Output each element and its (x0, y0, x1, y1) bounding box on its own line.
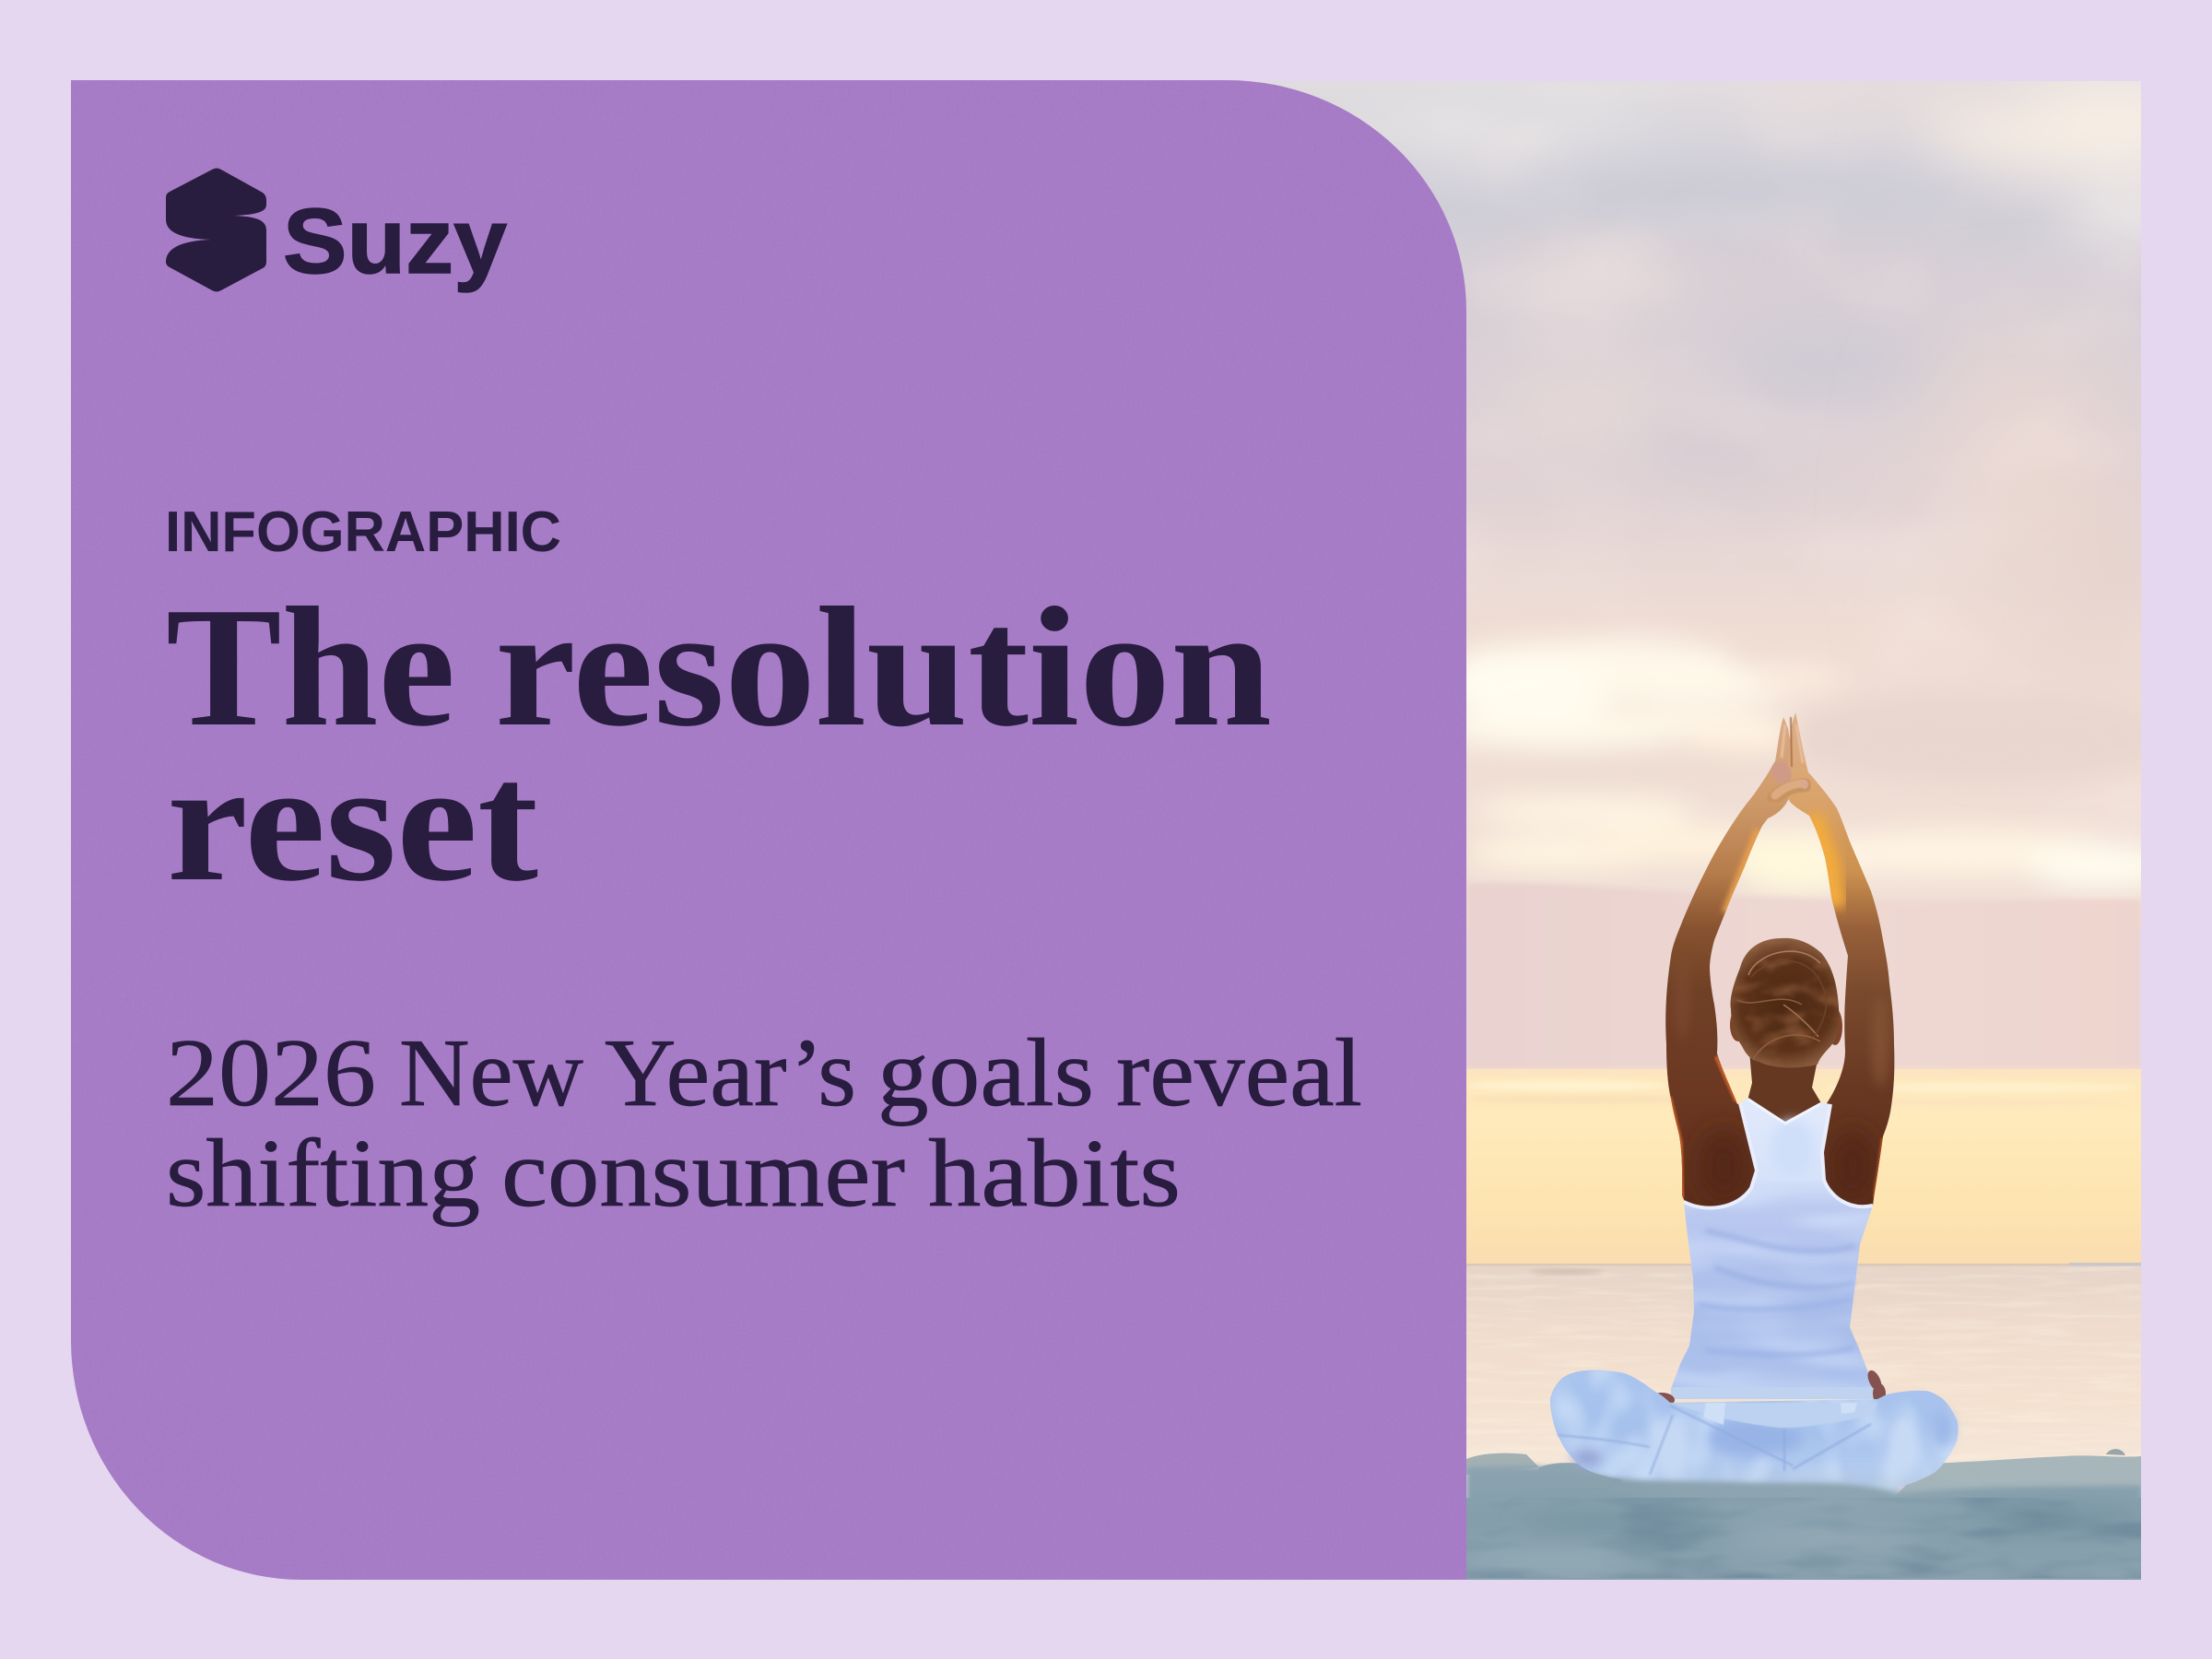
logo wordmark: Suzy (283, 190, 507, 293)
sea (1466, 1263, 2141, 1477)
hands resting by the hips (1657, 1370, 1886, 1403)
top: white racerback tank (1671, 1098, 1877, 1399)
title (166, 572, 1272, 917)
title: reset (167, 727, 538, 917)
eyebrow label: INFOGRAPHIC (165, 500, 561, 564)
person (1550, 712, 1958, 1498)
white trousers (1550, 1371, 1958, 1498)
subtitle: shifting (166, 1119, 480, 1227)
subtitle: goals (877, 1018, 1094, 1126)
title: The (166, 572, 455, 762)
panel: purple title card (71, 80, 1466, 1580)
subtitle (166, 1018, 1362, 1227)
left arm and hand (1665, 717, 1793, 1209)
title: resolution (495, 572, 1272, 762)
sky (1198, 76, 2212, 1267)
subtitle: Year’s (605, 1018, 856, 1126)
right arm and hand (1786, 712, 1894, 1209)
subtitle: 2026 (166, 1018, 376, 1126)
subtitle: New (399, 1018, 583, 1126)
subtitle: habits (928, 1119, 1181, 1227)
icon: Suzy hexagon S mark (166, 168, 266, 291)
back sand ridge (1466, 1449, 2141, 1502)
subtitle: reveal (1116, 1018, 1362, 1126)
hair (1730, 938, 1839, 1067)
photo: woman meditating on a beach at sunset (1198, 76, 2212, 1580)
subtitle: consumer (501, 1119, 905, 1227)
ears (1730, 1008, 1842, 1045)
clasped fingers (1768, 717, 1808, 798)
foreground sand (1456, 1465, 2141, 1580)
neck (1747, 1057, 1821, 1122)
logo: Suzy (166, 168, 507, 293)
